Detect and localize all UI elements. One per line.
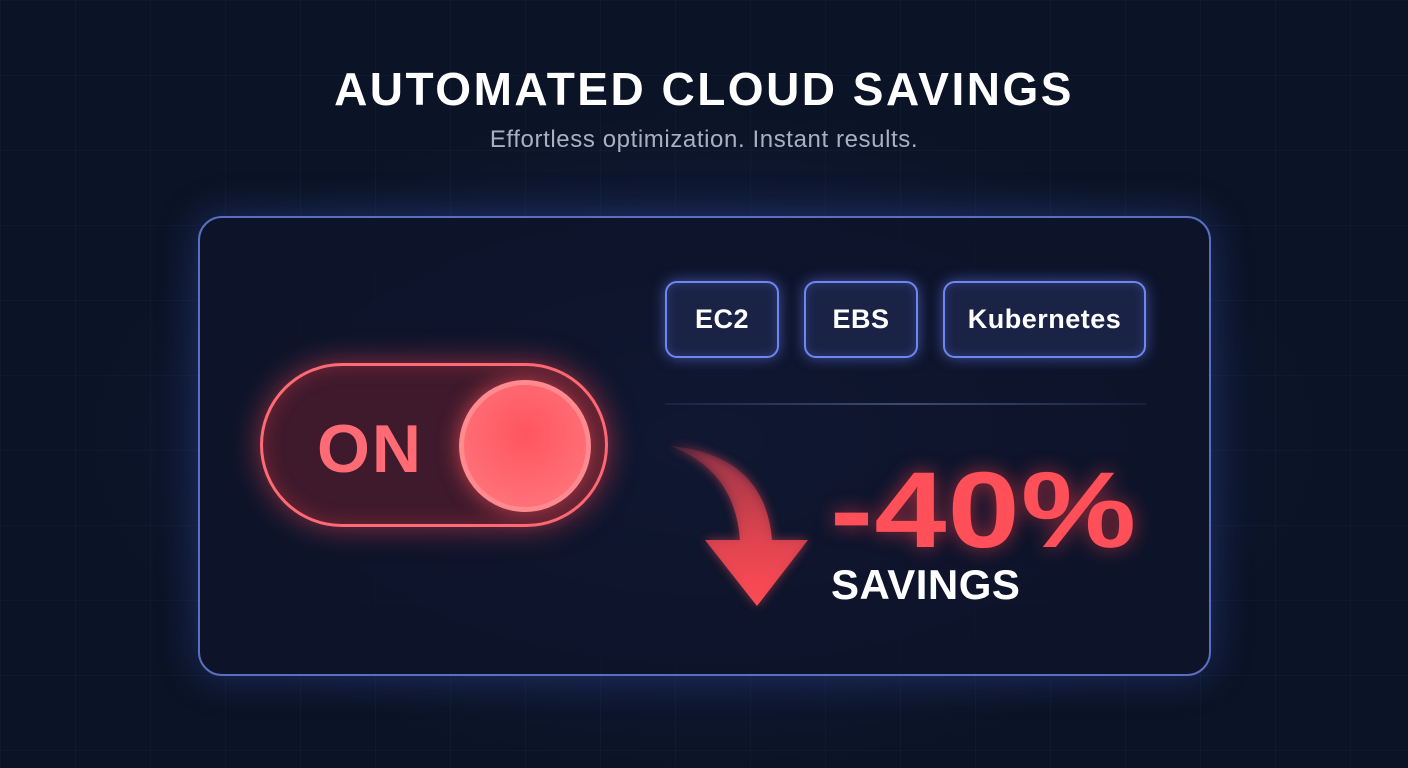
toggle knob — [459, 380, 591, 512]
chip: EBS: EBS — [832, 304, 890, 334]
stat: -40%: -40% — [830, 449, 1137, 570]
stat label: SAVINGS: SAVINGS — [831, 561, 1020, 608]
chip: EBS — [804, 281, 918, 358]
subtitle: Effortless optimization. Instant results. — [490, 126, 918, 153]
chip: Kubernetes — [943, 281, 1146, 358]
toggle label: ON: ON — [317, 411, 423, 487]
chip: Kubernetes: Kubernetes — [968, 304, 1121, 334]
chip: EC2: EC2 — [695, 304, 749, 334]
icon: down arrow — [670, 442, 811, 610]
panel: main card — [198, 216, 1211, 676]
chip: EC2 — [665, 281, 779, 358]
toggle switch — [260, 363, 608, 527]
divider — [665, 403, 1146, 405]
title: AUTOMATED CLOUD SAVINGS — [334, 63, 1074, 115]
